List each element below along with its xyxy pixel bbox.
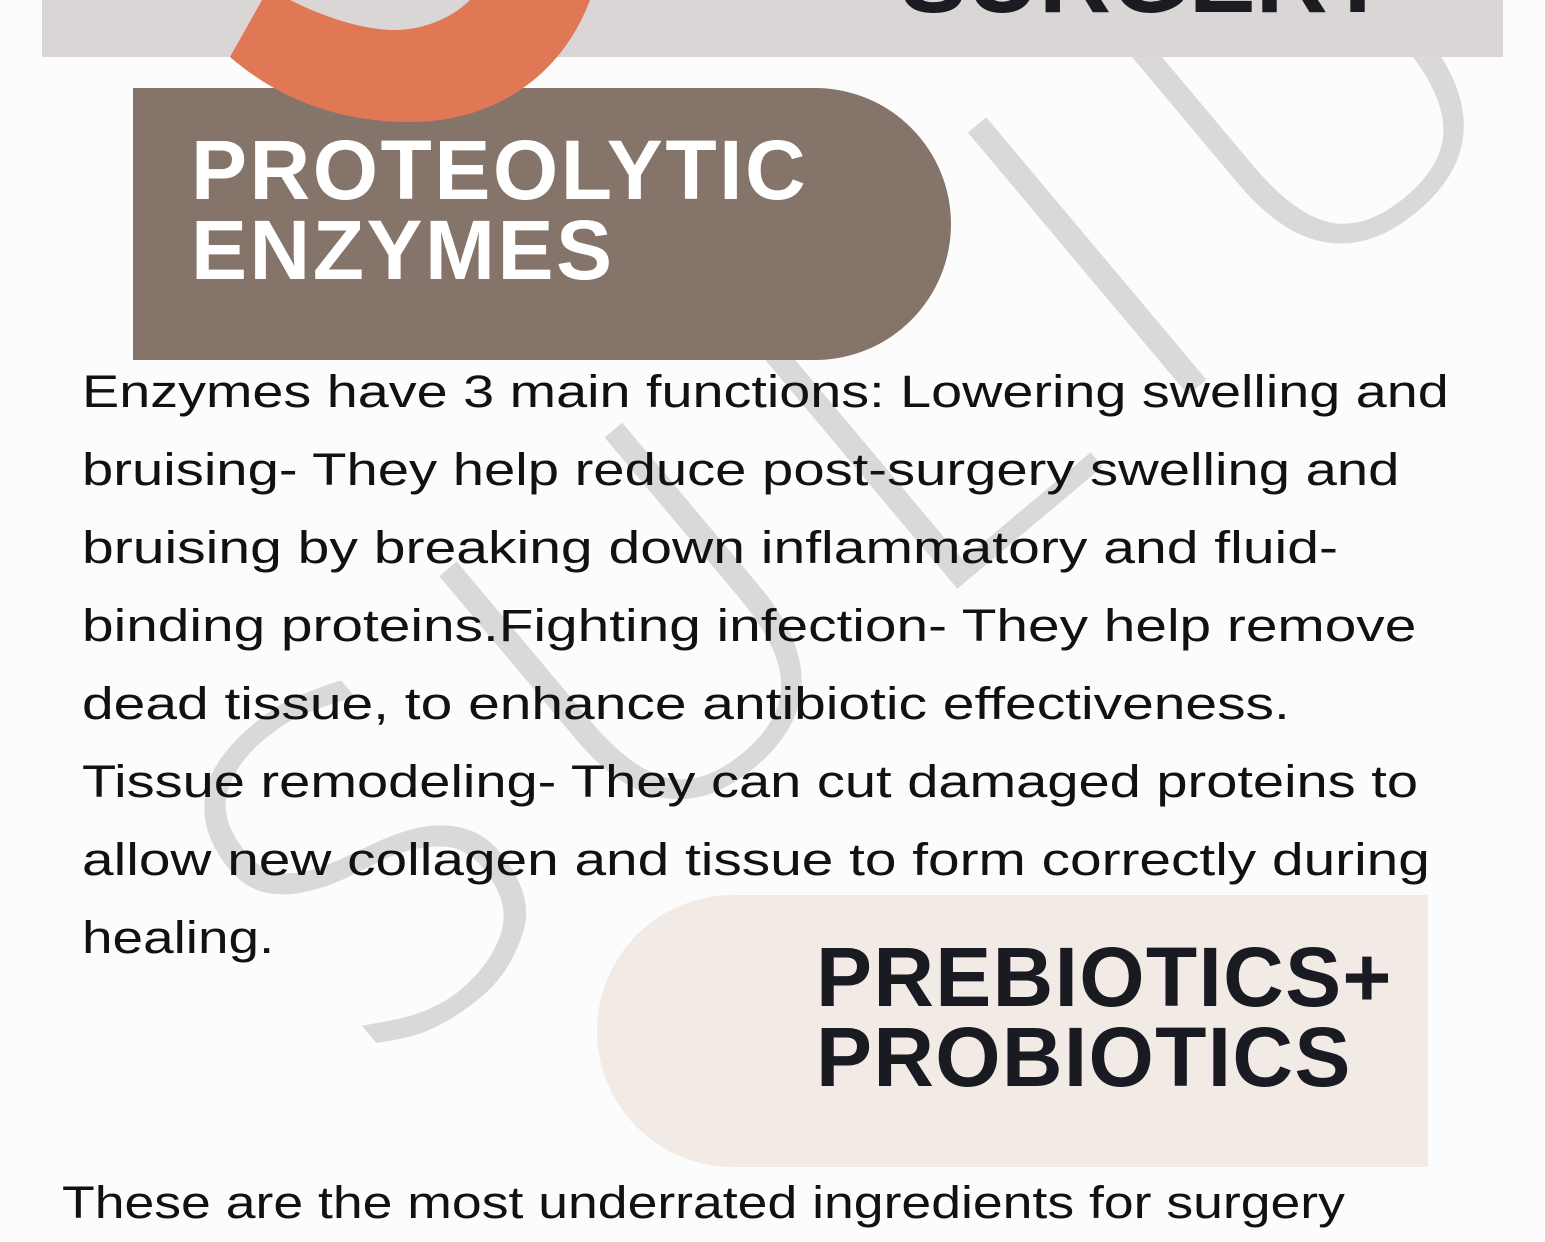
heading text: PREBIOTICS+ bbox=[816, 930, 1393, 1024]
heading text: PROBIOTICS bbox=[816, 1010, 1352, 1104]
text block: enzymes description: dead tissue, to enhance antibiotic effectiveness. bbox=[82, 678, 1290, 729]
text block: enzymes description: healing. bbox=[82, 912, 274, 963]
panel: prebiotics probiotics heading bbox=[597, 895, 1428, 1167]
heading text bbox=[191, 123, 808, 297]
text block: enzymes description: binding proteins.Fighting infection- They help remove bbox=[82, 600, 1416, 651]
text block: enzymes description: allow new collagen and tissue to form correctly during bbox=[82, 834, 1430, 885]
heading text: PROTEOLYTIC bbox=[191, 123, 808, 217]
text block: enzymes description: bruising- They help reduce post-surgery swelling and bbox=[82, 444, 1399, 495]
icon: orange number shape bbox=[230, 0, 590, 122]
text block: enzymes description: bruising by breaking down inflammatory and fluid- bbox=[82, 522, 1338, 573]
text block: enzymes description: Tissue remodeling- They can cut damaged proteins to bbox=[82, 756, 1418, 807]
text block: prebiotics intro: These are the most underrated ingredients for surgery bbox=[62, 1177, 1345, 1228]
top banner bbox=[42, 0, 1503, 57]
heading text: ENZYMES bbox=[191, 203, 615, 297]
heading text bbox=[816, 930, 1393, 1104]
text block: enzymes description bbox=[82, 366, 1449, 963]
text block: enzymes description: Enzymes have 3 main functions: Lowering swelling and bbox=[82, 366, 1449, 417]
panel: proteolytic enzymes heading bbox=[133, 88, 951, 360]
